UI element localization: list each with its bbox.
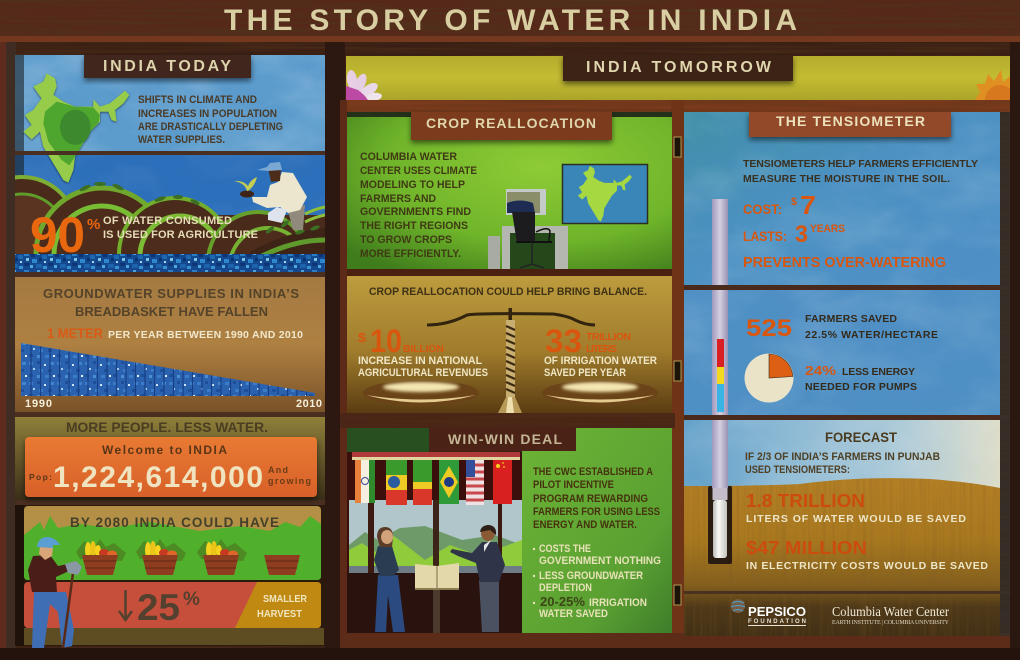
text: climate and population: INCREASES IN POPULATION (138, 108, 277, 120)
population sign: 1,224,614,000 (53, 461, 263, 494)
text: climate and population: ARE DRASTICALLY DEPLETING (138, 121, 283, 133)
heading tab (749, 112, 951, 137)
person: man (450, 525, 505, 632)
icon: full basket 3 (197, 539, 247, 575)
green text panel: FARMERS FOR USING LESS (533, 506, 660, 518)
logo: Columbia Water Center: Columbia Water Center (832, 605, 949, 620)
soil (684, 476, 1000, 636)
heading: CROP REALLOCATION COULD HELP BRING BALANCE. (369, 286, 647, 298)
stat: 525 farmers: 525 (746, 315, 792, 342)
green text panel: IRRIGATION (589, 597, 647, 609)
panel: balance scale (347, 276, 672, 413)
stat: 525 farmers: 22.5% WATER/HECTARE (805, 329, 938, 341)
heading tab: WIN-WIN DEAL (448, 431, 562, 447)
water band (15, 254, 325, 272)
flag: Ethiopia (386, 460, 407, 505)
panel: India today (15, 55, 325, 152)
stat: 33 trillion liters: TRILLION (586, 331, 631, 343)
green text panel: GOVERNMENT NOTHING (539, 555, 661, 567)
green text panel: WATER SAVED (539, 608, 608, 620)
chart: falling water table wedge (21, 343, 315, 396)
axis labels: 2010 (296, 398, 322, 410)
stat: 90 percent (30, 207, 258, 263)
axis labels: 1990 (25, 398, 52, 410)
shelf dividers left (15, 151, 325, 505)
panel: crop reallocation (347, 112, 672, 269)
sign: crops field: BY 2080 INDIA COULD HAVE (70, 515, 279, 530)
green text panel: PROGRAM REWARDING (533, 493, 648, 505)
axis labels (25, 398, 322, 410)
text: climate modeling: CENTER USES CLIMATE (360, 165, 477, 177)
stat: 47 million (746, 538, 988, 572)
panel: tensiometer results (684, 290, 1000, 415)
chart: pie 24 percent (744, 354, 794, 402)
wall map of India (562, 164, 648, 224)
population sign: Welcome to INDIA (102, 443, 227, 457)
logo: PepsiCo Foundation: FOUNDATION (748, 619, 806, 625)
logo: PepsiCo Foundation (731, 599, 806, 626)
text: climate modeling: FARMERS AND (360, 193, 436, 205)
text: forecast condition: USED TENSIOMETERS: (745, 464, 850, 476)
logo: PepsiCo Foundation: PEPSICO (748, 604, 806, 619)
panel: the tensiometer (684, 112, 1000, 285)
stat: 47 million: $47 MILLION (746, 538, 867, 558)
book on lectern (415, 563, 459, 633)
stats: cost and lifespan: LASTS: (743, 228, 787, 244)
heading tab (429, 428, 576, 451)
title banner (0, 0, 1020, 42)
text: climate and population: WATER SUPPLIES. (138, 134, 225, 146)
population sign (25, 437, 317, 497)
flag: India (355, 460, 375, 503)
stats: cost and lifespan: PREVENTS OVER-WATERING (743, 254, 946, 271)
heading tab: THE TENSIOMETER (776, 113, 925, 129)
stat: 1.8 trillion: LITERS OF WATER WOULD BE SAVED (746, 513, 966, 525)
left pan (363, 380, 479, 406)
green text panel: 20-25% (540, 594, 585, 609)
logo: Columbia Water Center: EARTH INSTITUTE | COLUMBIA UNIVERSITY (832, 620, 950, 626)
icon: hinges (674, 137, 681, 605)
text: climate and population: SHIFTS IN CLIMATE AND (138, 94, 257, 106)
text: climate and population (138, 94, 283, 146)
text: one meter per year: 1 METER (47, 325, 103, 341)
text: climate modeling: MODELING TO HELP (360, 179, 465, 191)
icon: farmer with seedling (234, 162, 307, 230)
title banner: THE STORY OF WATER IN INDIA (224, 4, 797, 37)
stat: 47 million: IN ELECTRICITY COSTS WOULD BE SAVED (746, 560, 988, 572)
stat: 33 trillion liters: SAVED PER YEAR (544, 367, 626, 379)
stat: 10 billion (358, 323, 488, 379)
text: one meter per year: PER YEAR BETWEEN 1990 AND 2010 (108, 329, 303, 341)
icon: India map with water stress zones (23, 73, 129, 183)
illustration: farmed hills (15, 175, 325, 254)
stats: cost and lifespan: 7 (800, 190, 816, 220)
population sign: growing (268, 476, 311, 486)
stat: 24 percent energy: LESS ENERGY (842, 366, 915, 378)
heading tab: India today: INDIA TODAY (103, 58, 231, 75)
panel: groundwater decline (15, 277, 325, 412)
stat: 24 percent energy: NEEDED FOR PUMPS (805, 381, 917, 393)
population sign: Pop: (29, 472, 52, 482)
panel: win-win deal (347, 428, 672, 633)
icon: lotus (346, 70, 382, 100)
panel: more people less water (15, 417, 325, 500)
stat: 10 billion: INCREASE IN NATIONAL (358, 355, 482, 367)
text: one meter per year (47, 325, 303, 341)
population sign: And (268, 465, 288, 475)
stats: cost and lifespan: 3 (795, 221, 808, 248)
icon: tensiometer tube (708, 199, 732, 564)
logo: Columbia Water Center (832, 605, 950, 626)
green text panel (347, 428, 672, 633)
illustration: meeting room with flags (347, 452, 522, 633)
panel: 2080 harvest (15, 505, 325, 648)
stat: 1.8 trillion: 1.8 TRILLION (746, 491, 865, 511)
stats: cost and lifespan: COST: (743, 201, 782, 217)
stat: 33 trillion liters: OF IRRIGATION WATER (544, 355, 657, 367)
stat: 525 farmers (746, 313, 938, 342)
text: intro: TENSIOMETERS HELP FARMERS EFFICIENTLY (743, 158, 978, 170)
heading: MORE PEOPLE. LESS WATER. (66, 420, 268, 435)
heading tab (411, 112, 612, 140)
text: climate modeling (360, 151, 477, 260)
stats: cost and lifespan: YEARS (810, 223, 845, 235)
stat: 525 farmers: FARMERS SAVED (805, 313, 897, 325)
text: groundwater heading: BREADBASKET HAVE FALLEN (75, 304, 268, 319)
stat: 1.8 trillion (746, 491, 966, 525)
green text panel: THE CWC ESTABLISHED A (533, 466, 653, 478)
stats: cost and lifespan (743, 190, 946, 271)
panel: forecast (684, 420, 1000, 636)
stat: 10 billion: BILLION (403, 343, 444, 355)
green text panel: PILOT INCENTIVE (533, 479, 614, 491)
shelf dividers right (684, 112, 1010, 636)
stat: 10 billion: $ (358, 330, 367, 345)
icon: full basket 1 (76, 539, 126, 575)
heading: FORECAST (825, 429, 897, 445)
stat: 24 percent energy (805, 363, 917, 393)
person: woman (374, 527, 405, 632)
text: groundwater heading: GROUNDWATER SUPPLIES IN INDIA’S (43, 286, 299, 301)
text: groundwater heading (43, 286, 299, 319)
heading tab: India today (84, 55, 251, 78)
flag: China (493, 460, 512, 504)
text: climate modeling: MORE EFFICIENTLY. (360, 248, 461, 260)
right pan (542, 380, 658, 406)
windows with landscape (349, 500, 522, 573)
stat: 33 trillion liters (544, 323, 657, 379)
panel: India tomorrow banner (346, 55, 1010, 100)
green text panel: ENERGY AND WATER. (533, 519, 637, 531)
text: climate modeling: COLUMBIA WATER (360, 151, 457, 163)
heading tab: CROP REALLOCATION (426, 115, 596, 131)
harvest bar: % (183, 589, 200, 610)
green text panel: COSTS THE (539, 543, 591, 555)
icon: farmer with stick (28, 537, 82, 648)
stat: 10 billion: AGRICULTURAL REVENUES (358, 367, 488, 379)
icon: empty basket (264, 555, 300, 575)
heading tab: India tomorrow: INDIA TOMORROW (586, 59, 772, 76)
arrow: down (119, 590, 132, 620)
panel: agriculture water use (15, 155, 325, 272)
text: climate modeling: GOVERNMENTS FIND (360, 206, 471, 218)
icon: sun (975, 70, 1010, 100)
text: forecast condition: IF 2/3 OF INDIA’S FARMERS IN PUNJAB (745, 451, 940, 463)
harvest bar: 25 (137, 587, 180, 628)
sign: crops field (24, 506, 321, 580)
stat: 10 billion: 10 (370, 323, 402, 359)
stat: 33 trillion liters: LITERS (586, 343, 617, 355)
stat: 24 percent energy: 24% (805, 363, 837, 378)
harvest bar: HARVEST (257, 609, 302, 620)
icon: scales (363, 308, 658, 413)
text: climate modeling: TO GROW CROPS (360, 234, 452, 246)
stats: cost and lifespan: $ (791, 196, 797, 208)
flag: USA (466, 460, 484, 505)
harvest bar (24, 582, 321, 628)
wood frame inside right section (340, 100, 1010, 648)
text: climate modeling: THE RIGHT REGIONS (360, 220, 468, 232)
flag: Mali (413, 460, 432, 505)
stat: 90 percent: % (87, 216, 100, 233)
harvest bar: SMALLER (263, 594, 308, 605)
text: forecast condition (745, 451, 940, 476)
desk and chair (488, 189, 568, 269)
stat: 33 trillion liters: 33 (545, 323, 582, 359)
icon: full basket 2 (136, 539, 186, 575)
green text panel: DEPLETION (539, 582, 592, 594)
stat: 90 percent: IS USED FOR AGRICULTURE (103, 229, 258, 241)
text: intro (743, 158, 978, 185)
text: intro: MEASURE THE MOISTURE IN THE SOIL. (743, 173, 950, 185)
green text panel: LESS GROUNDWATER (539, 570, 643, 582)
stat: 90 percent: 90 (30, 207, 85, 263)
heading tab: India tomorrow (563, 55, 793, 81)
banner rod (352, 452, 520, 460)
stat: 90 percent: OF WATER CONSUMED (103, 215, 232, 227)
flag: Brazil (439, 460, 459, 504)
